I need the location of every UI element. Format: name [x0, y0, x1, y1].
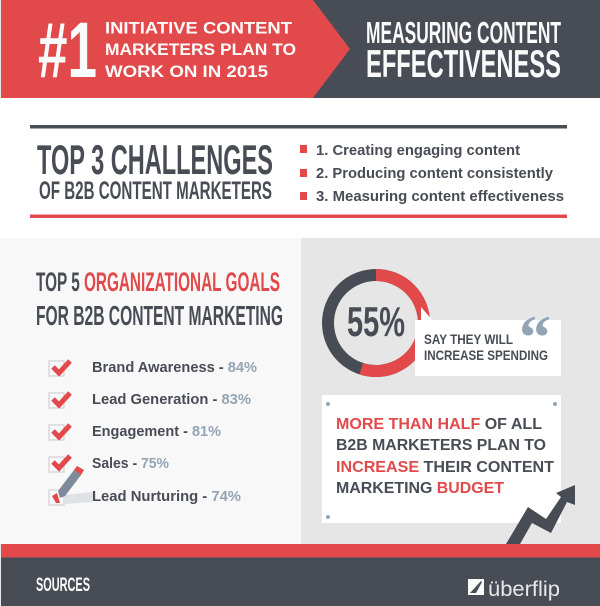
- card: more than half: [322, 395, 561, 523]
- list: challenges: [300, 142, 564, 205]
- list: goals with checkboxes: Lead Generation - 83%: [92, 391, 251, 408]
- text: initiative description: MARKETERS PLAN TO: [105, 40, 296, 59]
- list: challenges: 1. Creating engaging content: [316, 142, 520, 159]
- heading: number one: #1: [38, 5, 97, 94]
- callout: say they will increase spending: SAY THEY WILL: [424, 331, 513, 347]
- list: challenges: 3. Measuring content effectiveness: [316, 188, 564, 205]
- text: initiative description: WORK ON IN 2015: [105, 62, 268, 81]
- list: goals with checkboxes: [49, 359, 257, 505]
- card: more than half: B2B MARKETERS PLAN TO: [336, 437, 546, 454]
- card: more than half: INCREASE THEIR CONTENT: [336, 459, 554, 476]
- arrow: rising trend: [506, 485, 575, 544]
- chart: 55 percent donut: [328, 275, 424, 371]
- logo: uberflip: überflip: [488, 578, 560, 601]
- panel: organizational goals: [0, 238, 301, 544]
- text: initiative description: [105, 18, 296, 81]
- list: goals with checkboxes: Sales - 75%: [92, 455, 169, 472]
- chart: 55 percent donut: 55%: [347, 298, 405, 345]
- list: challenges: 2. Producing content consistently: [316, 165, 554, 182]
- list: goals with checkboxes: Brand Awareness - 84%: [92, 359, 257, 376]
- heading: top 5 goals: TOP 5 ORGANIZATIONAL GOALS: [36, 267, 280, 297]
- text: initiative description: INITIATIVE CONTENT: [105, 18, 293, 38]
- icon: quotation marks: “: [519, 304, 551, 372]
- panel: header banner: [0, 0, 600, 98]
- icon: pencil: [52, 466, 93, 504]
- card: more than half: MARKETING BUDGET: [336, 480, 504, 497]
- panel: spending statistics: [301, 238, 600, 544]
- list: goals with checkboxes: Lead Nurturing - 74%: [92, 488, 241, 505]
- heading: top 5 goals: FOR B2B CONTENT MARKETING: [36, 300, 283, 331]
- callout: say they will increase spending: INCREASE SPENDING: [424, 347, 548, 363]
- panel: footer: [0, 544, 600, 606]
- panel: top 3 challenges: [30, 125, 567, 218]
- callout: say they will increase spending: [415, 304, 561, 376]
- heading: top 3 challenges: TOP 3 CHALLENGES: [37, 136, 273, 183]
- card: more than half: MORE THAN HALF OF ALL: [336, 416, 542, 433]
- heading: top 3 challenges: [37, 136, 273, 205]
- heading: top 5 goals: [36, 267, 283, 331]
- heading: sources: SOURCES: [36, 575, 90, 596]
- heading: measuring content effectiveness: [366, 15, 561, 86]
- list: goals with checkboxes: Engagement - 81%: [92, 423, 221, 440]
- heading: top 3 challenges: OF B2B CONTENT MARKETERS: [39, 177, 272, 205]
